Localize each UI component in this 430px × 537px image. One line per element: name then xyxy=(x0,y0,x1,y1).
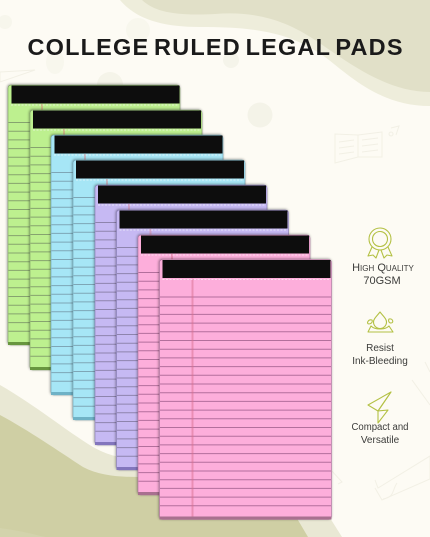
black header xyxy=(98,186,266,204)
label: high quality: High Quality xyxy=(352,262,415,274)
purple pad 5 xyxy=(95,185,267,445)
ruled lines xyxy=(74,197,244,407)
black header xyxy=(33,110,201,128)
label: 70gsm: 70GSM xyxy=(363,275,401,287)
green pad 1 xyxy=(8,85,180,345)
bottom edge xyxy=(160,516,332,520)
margin line xyxy=(84,154,86,392)
label: ink-bleeding: Ink-Bleeding xyxy=(352,356,408,367)
purple pad 6 xyxy=(116,210,288,470)
perforation xyxy=(162,278,330,280)
bottom edge xyxy=(116,467,288,470)
bottom left wave xyxy=(0,385,342,537)
ruled lines xyxy=(138,272,310,482)
paper xyxy=(8,85,180,345)
margin line xyxy=(41,104,43,342)
icon: award ribbon xyxy=(368,228,392,258)
label: versatile: Versatile xyxy=(361,435,400,446)
feature: high quality xyxy=(352,228,415,287)
ruled lines xyxy=(117,247,288,457)
black header xyxy=(54,136,222,154)
icon: ink drop xyxy=(368,312,393,332)
perforation xyxy=(54,154,222,156)
bottom edge xyxy=(30,367,202,370)
black header xyxy=(120,210,288,228)
black header xyxy=(162,260,330,278)
bottom edge xyxy=(138,492,310,495)
green pad 2 xyxy=(30,110,202,370)
paper xyxy=(95,185,267,445)
margin line xyxy=(150,229,152,467)
pink pad 8 xyxy=(160,260,332,520)
margin line xyxy=(128,204,130,442)
perforation xyxy=(141,254,309,256)
black header xyxy=(12,86,180,104)
perforation xyxy=(33,129,201,131)
title: COLLEGE RULED LEGAL PADS xyxy=(28,34,402,60)
feature: resist ink-bleeding xyxy=(352,312,408,367)
ruled lines xyxy=(52,172,222,382)
blue pad 4 xyxy=(73,160,245,420)
ruled lines xyxy=(160,296,331,506)
perforation xyxy=(11,104,179,106)
paper xyxy=(138,235,310,495)
perforation xyxy=(98,204,266,206)
perforation xyxy=(76,179,244,181)
margin line xyxy=(63,129,65,367)
ruled lines xyxy=(30,147,202,357)
margin line xyxy=(106,179,108,417)
paper xyxy=(116,210,288,470)
label: compact and: Compact and xyxy=(352,422,408,433)
ruled lines xyxy=(96,222,266,432)
perforation xyxy=(120,229,288,231)
blue pad 3 xyxy=(51,135,223,395)
bottom edge xyxy=(51,392,223,395)
margin line xyxy=(192,278,194,516)
paper xyxy=(30,110,202,370)
black header xyxy=(76,160,244,178)
black header xyxy=(141,236,309,254)
margin line xyxy=(171,254,173,492)
icon: paper plane xyxy=(368,392,391,423)
bottom edge xyxy=(73,417,245,420)
top right wave xyxy=(120,0,430,106)
pink pad 7 xyxy=(138,235,310,495)
ruled lines xyxy=(8,122,180,332)
feature: compact and versatile xyxy=(352,392,408,446)
bottom edge xyxy=(95,442,267,445)
paper xyxy=(51,135,223,395)
bottom edge xyxy=(8,342,180,345)
paper xyxy=(73,160,245,420)
paper xyxy=(160,260,332,520)
label: resist: Resist xyxy=(366,343,394,354)
